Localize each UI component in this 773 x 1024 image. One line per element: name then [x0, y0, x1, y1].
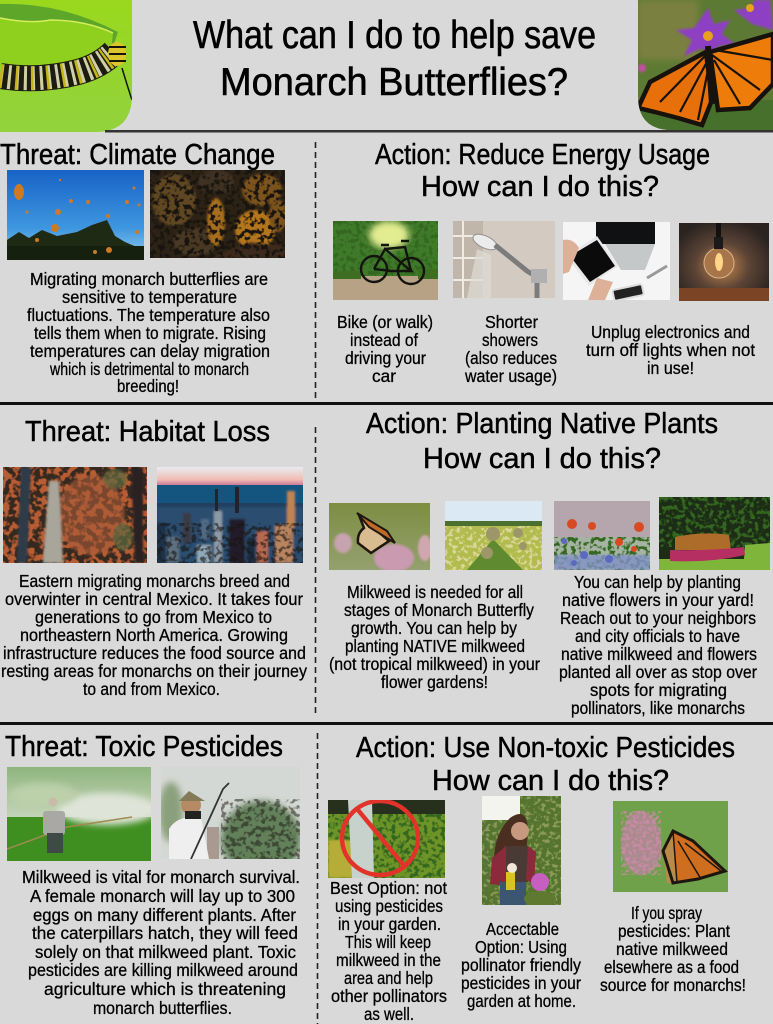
text: planting native flowers: planted all over as stop over	[559, 662, 757, 682]
caption: unplug electronics: Unplug electronics and	[591, 322, 750, 342]
photo: no spraying symbol over garden	[328, 800, 445, 878]
caption: shorter showers: Shorter	[485, 312, 538, 332]
body text: pesticides threat	[22, 867, 300, 1018]
body text: climate threat: which is detrimental to monarch	[49, 359, 249, 379]
text: planting native flowers: and city officials to have	[575, 626, 740, 646]
icon: monarch butterfly on purple flowers photo	[638, 0, 773, 130]
caption: unplug electronics	[586, 322, 755, 378]
body text: habitat threat: Eastern migrating monarchs breed and	[19, 571, 290, 591]
panel: non-toxic pesticides action	[328, 732, 746, 1024]
icon: caterpillar photo	[0, 0, 132, 132]
photo: shower head	[453, 221, 555, 298]
photo: monarch on milkweed	[329, 503, 430, 570]
photo: monarch on milkweed flower	[613, 801, 728, 892]
caption: if you spray	[600, 903, 746, 995]
caption: unplug electronics: turn off lights when not	[586, 340, 755, 360]
caption: best option: This will keep	[345, 932, 431, 952]
text: milkweed needed: flower gardens!	[381, 672, 488, 692]
photo: forest from above	[3, 467, 147, 563]
body text: habitat threat	[1, 571, 307, 699]
body text: pesticides threat: agriculture which is threatening	[44, 979, 286, 999]
caption: shorter showers: showers	[482, 330, 538, 350]
panel: climate change threat	[0, 139, 287, 396]
caption: if you spray: pesticides: Plant	[618, 921, 730, 941]
panel: habitat loss threat	[1, 416, 307, 699]
photo: milkweed meadow	[445, 501, 542, 570]
caption: acceptable option	[461, 919, 581, 1011]
body text: climate threat: fluctuations. The temperature also	[27, 305, 270, 325]
caption: shorter showers: (also reduces	[465, 348, 557, 368]
text: milkweed needed: Milkweed is needed for all	[347, 582, 523, 602]
text: planting native flowers	[559, 572, 757, 718]
caption: best option: milkweed in the	[336, 950, 441, 970]
body text: habitat threat: infrastructure reduces the food source and	[3, 643, 306, 663]
body text: habitat threat: resting areas for monarchs on their journey	[1, 661, 307, 681]
body text: pesticides threat: A female monarch will lay up to 300	[30, 886, 295, 906]
body text: pesticides threat: Milkweed is vital for monarch survival.	[22, 867, 300, 887]
text: planting native flowers: native flowers in your yard!	[562, 590, 754, 610]
text: milkweed needed: growth. You can help by	[351, 618, 517, 638]
body text: pesticides threat: pesticides are killing milkweed around	[28, 960, 298, 980]
heading: action planting native plants: How can I do this?	[423, 443, 661, 475]
panel: reduce energy action	[333, 139, 769, 386]
caption: bike or walk: instead of	[350, 330, 418, 350]
photo: garden flower bed	[659, 497, 770, 570]
title	[193, 14, 596, 104]
caption: if you spray: If you spray	[631, 903, 702, 923]
photo: glowing light bulb	[679, 223, 769, 301]
caption: best option: as well.	[364, 1004, 414, 1024]
body text: habitat threat: overwinter in central Mexico. It takes four	[5, 589, 303, 609]
text: milkweed needed	[329, 582, 540, 692]
title: What can I do to help save	[193, 14, 596, 57]
heading: threat habitat loss: Threat: Habitat Loss	[25, 416, 270, 448]
caption: acceptable option: Option: Using	[475, 937, 567, 957]
photo: man spraying in greenhouse	[161, 777, 300, 859]
caption: shorter showers: water usage)	[464, 366, 557, 386]
body text: pesticides threat: solely on that milkweed plant. Toxic	[35, 942, 296, 962]
text: planting native flowers: You can help by planting	[574, 572, 741, 592]
text: planting native flowers: spots for migrating	[590, 680, 727, 700]
vertical dashed dividers	[316, 142, 318, 1024]
caption: bike or walk: Bike (or walk)	[337, 312, 433, 332]
heading: action planting native plants	[366, 408, 718, 475]
panel: native plants action	[329, 408, 770, 718]
body text: habitat threat: northeastern North America. Growing	[20, 625, 288, 645]
caption: best option: other pollinators	[331, 986, 447, 1006]
caption: acceptable option: pollinator friendly	[461, 955, 581, 975]
caption: bike or walk	[337, 312, 433, 386]
heading: action reduce energy usage	[375, 139, 710, 203]
caption: acceptable option: pesticides in your	[461, 973, 581, 993]
body text: climate threat: tells them when to migrate. Rising	[34, 323, 266, 343]
heading: action use non-toxic pesticides: Action: Use Non-toxic Pesticides	[356, 732, 735, 764]
text: planting native flowers: pollinators, like monarchs	[571, 698, 745, 718]
heading: action reduce energy usage: Action: Reduce Energy Usage	[375, 139, 710, 171]
heading: action use non-toxic pesticides: How can I do this?	[432, 765, 669, 797]
photo: bicycle on forest path	[333, 221, 438, 300]
heading: threat toxic pesticides: Threat: Toxic Pesticides	[5, 731, 283, 763]
text: milkweed needed: planting NATIVE milkweed	[345, 636, 525, 656]
caption: bike or walk: car	[372, 366, 396, 386]
text: milkweed needed: (not tropical milkweed) in your	[329, 654, 540, 674]
photo: woman gardening	[482, 796, 561, 905]
heading: threat climate change: Threat: Climate Change	[0, 139, 275, 171]
body text: pesticides threat: eggs on many different plants. After	[33, 905, 296, 925]
caption: best option: area and help	[344, 968, 433, 988]
caption: shorter showers	[464, 312, 557, 386]
caption: acceptable option: garden at home.	[467, 991, 576, 1011]
photo: farmer spraying rice field	[7, 767, 151, 861]
body text: habitat threat: generations to go from Mexico to	[35, 607, 272, 627]
body text: climate threat: breeding!	[117, 376, 179, 396]
body text: climate threat: sensitive to temperature	[62, 287, 237, 307]
caption: best option	[330, 878, 447, 1024]
body text: pesticides threat: the caterpillars hatch, they will feed	[32, 923, 298, 943]
body text: habitat threat: to and from Mexico.	[83, 679, 220, 699]
caption: best option: in your garden.	[338, 914, 441, 934]
caption: if you spray: source for monarchs!	[600, 975, 746, 995]
section divider lines	[0, 130, 773, 725]
title: Monarch Butterflies?	[220, 61, 568, 104]
body text: climate threat	[27, 269, 270, 396]
heading: action reduce energy usage: How can I do this?	[421, 171, 659, 203]
photo: city skyline	[157, 467, 303, 563]
caption: best option: using pesticides	[335, 896, 443, 916]
caption: if you spray: elsewhere as a food	[604, 957, 739, 977]
photo: monarchs flying in blue sky	[7, 170, 144, 260]
text: milkweed needed: stages of Monarch Butterfly	[344, 600, 534, 620]
body text: pesticides threat: monarch butterflies.	[93, 998, 232, 1018]
photo: monarch cluster	[150, 170, 285, 258]
caption: bike or walk: driving your	[345, 348, 426, 368]
body text: climate threat: Migrating monarch butterflies are	[30, 269, 268, 289]
caption: best option: Best Option: not	[330, 878, 447, 898]
body text: climate threat: temperatures can delay migration	[30, 341, 270, 361]
panel: toxic pesticides threat	[5, 731, 301, 1018]
heading: action use non-toxic pesticides	[356, 732, 735, 797]
photo: tablet, laptop and phone	[563, 222, 670, 300]
caption: if you spray: native milkweed	[616, 939, 728, 959]
caption: unplug electronics: in use!	[647, 358, 694, 378]
caption: acceptable option: Accectable	[486, 919, 559, 939]
heading: action planting native plants: Action: Planting Native Plants	[366, 408, 718, 440]
photo: poppies and cornflowers	[554, 501, 650, 570]
